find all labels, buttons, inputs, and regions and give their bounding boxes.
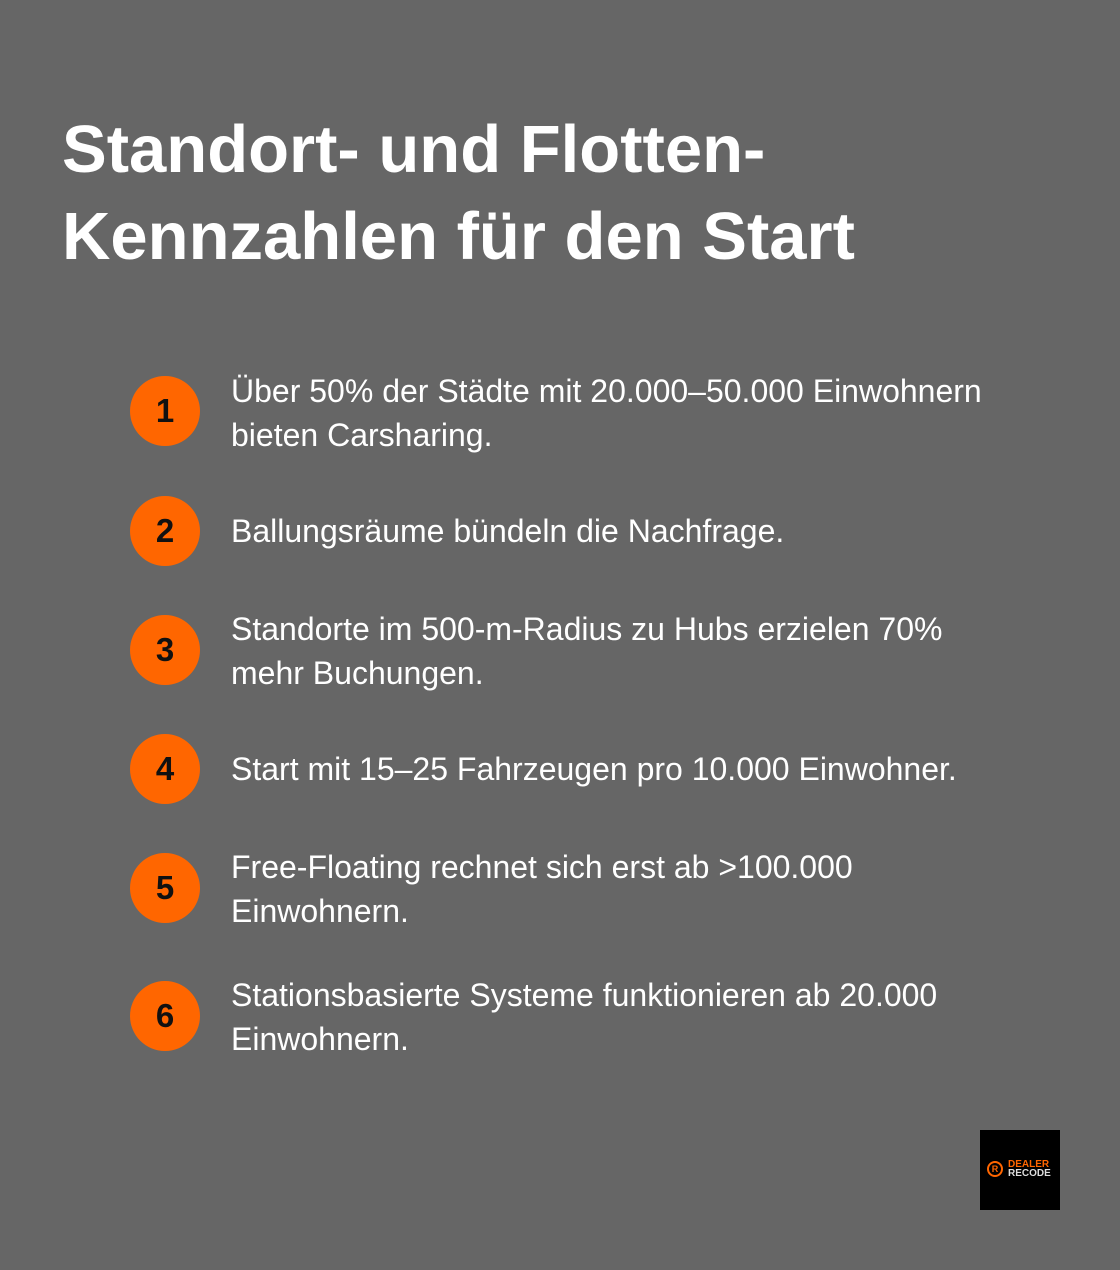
- text 4: Start mit 15–25 Fahrzeugen pro 10.000 Einwohner.: [231, 751, 957, 787]
- text 6: Stationsbasierte Systeme funktionieren ab 20.000 Einwohnern.: [231, 977, 937, 1057]
- circle 5: [130, 853, 200, 923]
- logo icon: R: [992, 1164, 998, 1174]
- circle 2: 2: [156, 512, 174, 549]
- title: Standort- und Flotten-: [62, 112, 765, 187]
- text 5: Free-Floating rechnet sich erst ab >100.000 Einwohnern.: [231, 849, 853, 929]
- circle 6: [130, 981, 200, 1051]
- text 1: Über 50% der Städte mit 20.000–50.000 Einwohnern bieten Carsharing.: [231, 373, 982, 453]
- logo text: DEALER: [1008, 1159, 1049, 1170]
- text 2: Ballungsräume bündeln die Nachfrage.: [231, 513, 784, 549]
- circle 3: 3: [156, 631, 174, 668]
- logo icon: [987, 1161, 1003, 1177]
- circle 4: 4: [156, 750, 174, 787]
- circle 6: 6: [156, 997, 174, 1034]
- circle 3: [130, 615, 200, 685]
- item 1: [130, 373, 982, 453]
- circle 5: 5: [156, 869, 174, 906]
- circle 1: [130, 376, 200, 446]
- circle 1: 1: [156, 392, 174, 429]
- item 6: [130, 977, 937, 1057]
- item 3: [130, 611, 942, 691]
- logo text: RECODE: [1008, 1168, 1051, 1179]
- title: Kennzahlen für den Start: [62, 199, 855, 274]
- circle 2: [130, 496, 200, 566]
- circle 4: [130, 734, 200, 804]
- item 4: [130, 734, 957, 804]
- text 3: Standorte im 500-m-Radius zu Hubs erzielen 70% mehr Buchungen.: [231, 611, 942, 691]
- item 5: [130, 849, 853, 929]
- logo: [980, 1130, 1060, 1210]
- item 2: [130, 496, 784, 566]
- title: [62, 112, 855, 274]
- logo text: [1008, 1159, 1051, 1179]
